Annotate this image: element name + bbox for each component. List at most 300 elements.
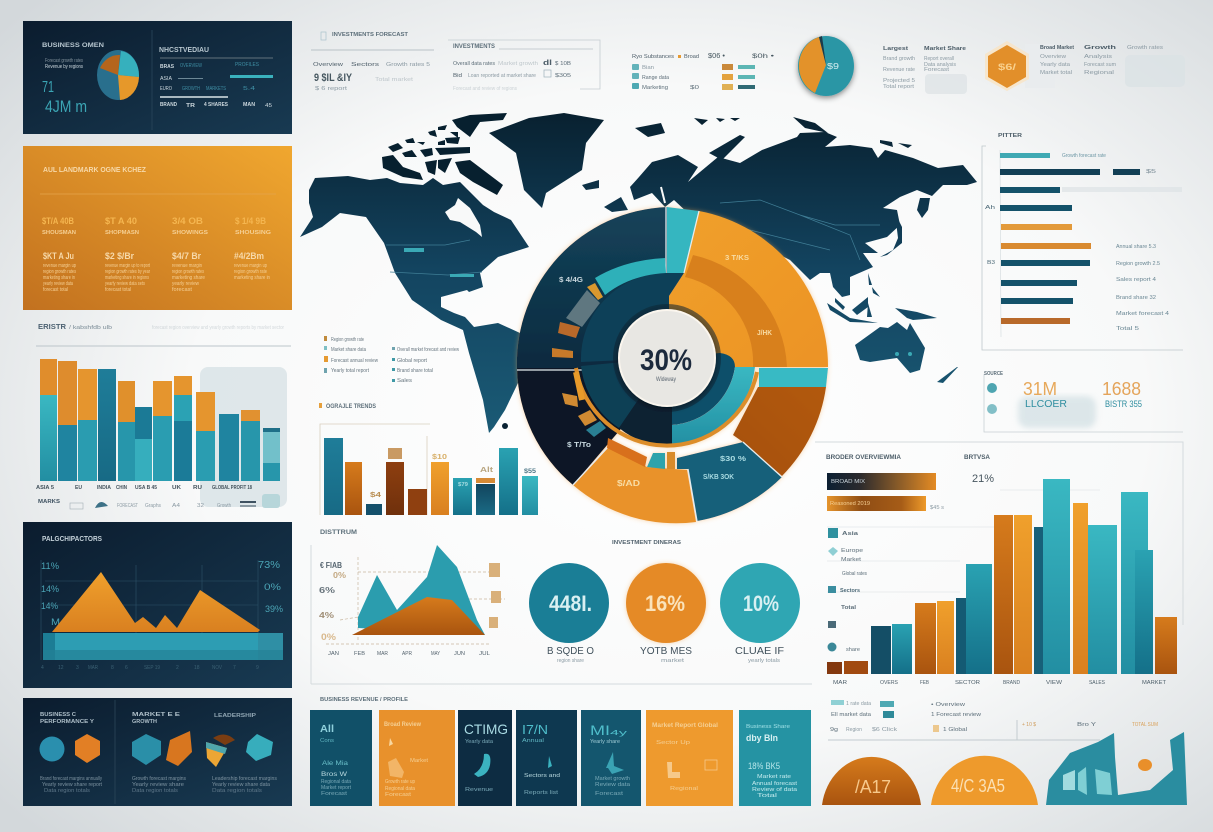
stat columns: SHOUSING bbox=[235, 230, 271, 236]
heading: PITTER bbox=[998, 133, 1022, 139]
x labels bbox=[328, 651, 490, 657]
block: far right text: Yearly data bbox=[1040, 62, 1070, 68]
block: top descriptive text: Projected 5 bbox=[883, 78, 915, 84]
stat columns: SHOUSMAN bbox=[42, 230, 76, 236]
icon row bbox=[38, 494, 280, 509]
descriptions: Yearly review share bbox=[132, 782, 184, 788]
dome stat: rust bbox=[822, 757, 921, 805]
x labels: MAR bbox=[377, 651, 388, 657]
x labels: APR bbox=[402, 651, 412, 657]
bar chart: mid left bbox=[319, 403, 538, 515]
heading: BUSINESS OMEN bbox=[42, 42, 104, 49]
right stats panel: BISTR 355 bbox=[1105, 399, 1142, 409]
body text: region growth rates bbox=[43, 269, 76, 275]
block: top legend table: Ryo Substances bbox=[632, 54, 675, 60]
heading: INVESTMENT DINERAS bbox=[612, 540, 681, 546]
icon: orange gem bbox=[206, 734, 235, 767]
row labels bbox=[985, 153, 1169, 332]
table rows: BRAND bbox=[160, 102, 177, 108]
card: navy two: Reports list bbox=[524, 790, 559, 796]
body text: forecast total bbox=[105, 287, 131, 293]
big orange sector bbox=[669, 211, 828, 367]
body text: yearly review data bbox=[43, 281, 73, 287]
row labels: Region growth 2.5 bbox=[1116, 261, 1160, 267]
stat columns: $4/7 Br bbox=[172, 251, 201, 261]
axis labels: ASIA 5 bbox=[36, 485, 54, 491]
body text: revenue margin bbox=[172, 263, 202, 269]
body text: region growth rates by year bbox=[105, 269, 150, 275]
block: top table: $305 bbox=[555, 73, 571, 79]
heading: DISTTRUM bbox=[320, 530, 357, 536]
block: far right text bbox=[1040, 45, 1185, 87]
card: navy two: Sectors and bbox=[524, 773, 560, 779]
x labels: 6 bbox=[125, 665, 128, 671]
card: navy two bbox=[516, 710, 577, 806]
stat: teal circle: 448I. bbox=[549, 591, 592, 616]
legend: bottom right: Region bbox=[846, 727, 862, 733]
bars bbox=[324, 438, 538, 515]
block: top descriptive text: Largest bbox=[883, 46, 908, 52]
gradient bars: BROAD MIX bbox=[831, 479, 866, 485]
x labels: 12 bbox=[58, 665, 64, 671]
horizontal bar chart bbox=[982, 133, 1183, 350]
x labels: 2 bbox=[176, 665, 179, 671]
block: top table: Forecast and review of regions bbox=[453, 86, 517, 92]
block: top table: INVESTMENTS bbox=[453, 44, 495, 50]
stat: teal circle: region share bbox=[557, 658, 584, 664]
teal area bbox=[358, 545, 485, 635]
card: navy one: Yearly data bbox=[465, 739, 493, 745]
ring segments bbox=[552, 283, 606, 437]
icons bbox=[987, 383, 997, 414]
table rows: TR bbox=[186, 103, 196, 109]
card: teal two: Forecast bbox=[595, 791, 624, 797]
axis labels bbox=[41, 560, 283, 627]
x labels: MAR bbox=[88, 665, 98, 671]
table rows: ASIA bbox=[160, 76, 173, 82]
faint row shading bbox=[1062, 187, 1182, 192]
y labels bbox=[319, 561, 346, 642]
stat columns: $ 1/4 9B bbox=[235, 216, 266, 226]
table rows: 4 SHARES bbox=[204, 102, 229, 108]
inner upper left quadrant bbox=[581, 273, 684, 362]
teal top wedge bbox=[667, 207, 699, 273]
block: top investments text: 9 $IL &IY bbox=[314, 72, 353, 84]
legend: bottom right: Ell market data bbox=[831, 712, 871, 718]
block: top table: $ 10B bbox=[555, 61, 572, 67]
donut labels: $ 4/4G bbox=[559, 277, 584, 284]
axis labels: 14% bbox=[41, 601, 58, 611]
body text: region growth rate bbox=[234, 269, 267, 275]
block: top legend table: Range data bbox=[642, 75, 669, 81]
card: teal three bbox=[739, 710, 811, 806]
block: top legend table bbox=[632, 53, 774, 91]
axis labels: OVERS bbox=[880, 680, 899, 686]
icon: teal hexagon bbox=[132, 734, 161, 765]
body text: marketing share in bbox=[43, 275, 75, 281]
Franz Josef islands bbox=[635, 123, 665, 137]
card: orange one: Growth rate up bbox=[385, 779, 415, 785]
card: teal three: Annual forecast bbox=[752, 781, 798, 787]
y labels: € FIAB bbox=[320, 561, 342, 570]
row labels: Sales report 4 bbox=[1116, 277, 1156, 283]
stat columns: $2 $/Br bbox=[105, 251, 134, 261]
card: teal two: Review data bbox=[595, 782, 630, 788]
card: teal three: Market rate bbox=[757, 774, 791, 780]
icon: orange hexagon badge bbox=[985, 41, 1055, 91]
card: navy two: Annual bbox=[522, 738, 544, 744]
descriptions: Data region totals bbox=[212, 788, 263, 794]
block: far right text: Market total bbox=[1040, 70, 1072, 76]
gradient bars: Reasoned 2019 bbox=[830, 501, 870, 507]
x labels: 4 bbox=[41, 665, 44, 671]
icon row: MARKS bbox=[38, 499, 61, 505]
descriptions: Yearly review share report bbox=[42, 782, 103, 788]
axis labels: MARKET bbox=[1142, 680, 1166, 686]
axis labels: CHIN bbox=[116, 485, 127, 491]
axis labels: INDIA bbox=[97, 485, 111, 491]
card: teal three: Total bbox=[757, 793, 777, 799]
block: far right text: Regional bbox=[1084, 70, 1114, 76]
body text: marketing share in bbox=[234, 275, 270, 281]
navy upper left sector bbox=[517, 207, 667, 368]
dark teal lower sector bbox=[677, 442, 782, 521]
axis labels: 73% bbox=[258, 560, 280, 571]
card: teal three: dby Bln bbox=[746, 733, 778, 743]
table rows: PROFILES bbox=[235, 62, 260, 68]
y labels: 6% bbox=[319, 586, 335, 595]
panel: dark area chart bbox=[23, 522, 292, 688]
block: top investments text: INVESTMENTS FORECAST bbox=[332, 32, 409, 38]
value labels: Alt bbox=[480, 467, 494, 474]
text lines: Revenue by regions bbox=[45, 64, 83, 70]
row labels: Brand share 32 bbox=[1116, 295, 1156, 301]
teal band bbox=[43, 633, 283, 660]
legend: bottom right: 1 Global bbox=[943, 727, 967, 733]
block: top descriptive text: Revenue rate bbox=[883, 67, 915, 73]
block: top descriptive text: Market Share bbox=[924, 46, 966, 52]
block: far right text: Overview bbox=[1040, 54, 1066, 60]
row labels: $5 bbox=[1146, 169, 1156, 175]
body text: forecast total bbox=[43, 287, 68, 293]
icon row: A4 bbox=[172, 503, 180, 509]
circle stats bbox=[529, 540, 800, 664]
panel: top-left dark summary: 4JM m bbox=[45, 97, 87, 116]
chart legend: Market share data bbox=[331, 347, 366, 353]
descriptions: Data region totals bbox=[132, 788, 179, 794]
stat columns bbox=[42, 216, 271, 261]
block: top legend table: $0 bbox=[690, 85, 699, 91]
x labels: 7 bbox=[233, 665, 236, 671]
table rows: OVERVIEW bbox=[180, 63, 202, 69]
axis labels: USA B 45 bbox=[135, 485, 157, 491]
value labels: $4 bbox=[370, 492, 381, 499]
dark orange ring band bbox=[685, 255, 787, 367]
stat: orange circle: 16% bbox=[645, 591, 685, 616]
axis labels: BRAND bbox=[1003, 680, 1020, 686]
card: orange one: Market bbox=[410, 758, 429, 764]
axis labels: M bbox=[51, 617, 60, 627]
row labels: Annual share 5.3 bbox=[1116, 244, 1156, 250]
row labels: Ah bbox=[985, 205, 995, 211]
legend: Asia bbox=[842, 531, 858, 537]
card: teal dark: Market report bbox=[321, 785, 352, 791]
gradient bars: 21% bbox=[972, 473, 994, 485]
donut labels bbox=[559, 255, 772, 488]
block: top investments text: $ 6 report bbox=[315, 86, 348, 92]
legend: share bbox=[846, 647, 860, 653]
stat: orange circle bbox=[626, 563, 706, 664]
block: top table: Overall data rates bbox=[453, 61, 496, 67]
teal right band bbox=[759, 368, 828, 387]
heading: AUL LANDMARK OGNE KCHEZ bbox=[43, 167, 147, 174]
chart legend: Forecast annual review bbox=[331, 358, 378, 364]
dome stat: rust: /A17 bbox=[855, 777, 891, 797]
row labels: B3 bbox=[987, 260, 995, 266]
card: teal dark: Bros W bbox=[321, 772, 347, 778]
card: teal two: 4y bbox=[610, 730, 628, 737]
card: navy one: CTIMG bbox=[464, 721, 508, 737]
block: top descriptive text: Data analysis bbox=[924, 62, 957, 68]
table rows: BRAS bbox=[160, 64, 175, 70]
block: top descriptive text: Report overall bbox=[924, 56, 954, 62]
stat: teal circle bbox=[529, 563, 609, 664]
value labels: $55 bbox=[524, 469, 537, 475]
figures: 31M bbox=[1023, 379, 1057, 399]
x labels: JUL bbox=[479, 651, 490, 657]
card: teal three: 18% BK5 bbox=[748, 761, 780, 771]
bar chart: lower right bbox=[826, 455, 1177, 686]
right heading: NHCSTVEDIAU bbox=[159, 47, 209, 54]
heading: PALGCHIPACTORS bbox=[42, 536, 102, 543]
block: top legend table: Bian bbox=[642, 65, 654, 71]
icon row: 32 bbox=[197, 503, 204, 509]
orange mountains bbox=[52, 572, 260, 632]
figures: 71 bbox=[42, 79, 54, 96]
block: top descriptive text bbox=[883, 46, 967, 94]
descriptions bbox=[40, 776, 278, 794]
axis labels: MAR bbox=[833, 680, 847, 686]
icon row: Growth bbox=[217, 503, 231, 509]
value labels bbox=[370, 448, 537, 499]
bars bbox=[40, 359, 280, 481]
legend: Total bbox=[841, 605, 857, 611]
row labels: Total 5 bbox=[1116, 326, 1139, 332]
block: top investments text: Overview bbox=[313, 62, 344, 68]
icon: orange hexagon bbox=[75, 734, 100, 763]
headings bbox=[40, 712, 256, 725]
stacked bar chart heading: forecast region overview and yearly growth reports by market sector bbox=[152, 325, 284, 331]
icon row: FORECAST bbox=[117, 503, 138, 509]
card: orange one: Forecast bbox=[385, 792, 412, 798]
chart legend: Brand share total bbox=[397, 368, 433, 374]
legend: Global rates bbox=[842, 571, 867, 577]
block: top investments text bbox=[311, 32, 434, 92]
descriptions: Brand forecast margins annually bbox=[40, 776, 102, 782]
axis labels bbox=[36, 485, 252, 491]
card: orange two: Market Report Global bbox=[652, 723, 718, 729]
table rows: 5.4 bbox=[243, 86, 255, 92]
table rows bbox=[160, 58, 273, 109]
card: teal two bbox=[581, 710, 641, 806]
block: far right text: Broad Market bbox=[1040, 45, 1074, 51]
grid lines bbox=[41, 560, 258, 660]
legend: bottom right: + 10 $ bbox=[1022, 722, 1036, 728]
card: navy two: I7/N bbox=[522, 722, 548, 737]
x labels: 18 bbox=[194, 665, 200, 671]
stat: teal circle: B SQDE O bbox=[547, 646, 594, 657]
block: top table: Market growth bbox=[498, 61, 538, 67]
card: teal two: Yearly share bbox=[590, 739, 620, 745]
headings: BUSINESS C bbox=[40, 712, 76, 718]
axis labels bbox=[833, 680, 1166, 686]
stat columns: $KT A Ju bbox=[43, 251, 74, 261]
block: far right text: Growth rates bbox=[1127, 45, 1164, 51]
value labels: $79 bbox=[458, 482, 468, 488]
legend bbox=[828, 528, 867, 653]
card: teal two: Market growth bbox=[595, 776, 630, 782]
axis labels: RU bbox=[193, 485, 202, 491]
table rows: MAN bbox=[243, 102, 255, 108]
stat columns: SHOPMASN bbox=[105, 230, 139, 236]
body text bbox=[43, 263, 270, 293]
y labels: 0% bbox=[321, 632, 336, 642]
Arctic islands bbox=[382, 113, 507, 195]
card: teal three: Business Share bbox=[746, 724, 790, 730]
lower ring segments bbox=[607, 438, 675, 469]
body text: region growth rates bbox=[172, 269, 204, 275]
headings: LEADERSHIP bbox=[214, 713, 256, 719]
Siberian islands bbox=[793, 117, 912, 148]
stat: light teal circle: 10% bbox=[743, 591, 779, 616]
axis labels: UK bbox=[172, 485, 181, 491]
card: orange one bbox=[379, 710, 455, 806]
block: top legend table: $0h • bbox=[752, 54, 774, 60]
headings: PERFORMANCE Y bbox=[40, 719, 94, 725]
x labels: SEP 19 bbox=[144, 665, 160, 671]
axis labels: FEB bbox=[920, 680, 930, 686]
legend: bottom right: • Overview bbox=[931, 702, 966, 708]
right stats panel bbox=[984, 371, 1183, 432]
axis labels: 0% bbox=[264, 582, 281, 592]
legend: bottom right: Bro Y bbox=[1077, 722, 1097, 728]
axis labels: 39% bbox=[265, 604, 283, 614]
legend: bottom right bbox=[828, 700, 1158, 740]
rust area bbox=[352, 597, 485, 635]
inner bottom quadrant bbox=[619, 358, 672, 447]
right markers bbox=[489, 563, 501, 628]
block: top descriptive text: Forecast bbox=[924, 67, 950, 73]
Iceland bbox=[582, 180, 599, 190]
chart legend: Sales bbox=[397, 378, 413, 384]
descriptions: Leadership forecast margins bbox=[212, 776, 278, 782]
Greenland bbox=[489, 113, 604, 208]
card: teal three: Review of data bbox=[752, 787, 797, 793]
legend: Sectors bbox=[840, 588, 860, 594]
chart legend bbox=[324, 336, 459, 384]
x labels bbox=[41, 665, 259, 671]
stat: light teal circle: CLUAE IF bbox=[735, 646, 784, 657]
icon row: Graphs bbox=[145, 503, 161, 509]
value labels: $10 bbox=[432, 454, 447, 461]
card: orange two: Sector Up bbox=[656, 740, 690, 746]
chart legend: Overall market forecast and review bbox=[397, 347, 459, 353]
black lower left sector bbox=[517, 368, 667, 485]
row labels: Market forecast 4 bbox=[1116, 311, 1169, 317]
card: orange one: Broad Review bbox=[384, 722, 421, 728]
stat columns: 3/4 OB bbox=[172, 216, 204, 226]
top pie chart: $9 bbox=[827, 62, 840, 71]
orange ring bbox=[576, 368, 757, 446]
table rows: GROWTH bbox=[182, 86, 200, 92]
stacked bar chart heading bbox=[36, 324, 291, 346]
dome stat: orange: 4/C 3A5 bbox=[951, 776, 1005, 796]
descriptions: Data region totals bbox=[44, 788, 91, 794]
guide lines bbox=[326, 557, 505, 644]
area chart panel bbox=[311, 442, 1183, 684]
body text: revenue margin up bbox=[234, 263, 267, 269]
body text: marketing share bbox=[172, 275, 205, 281]
card: orange two bbox=[646, 710, 733, 806]
body text: revenue margin up to report bbox=[105, 263, 150, 269]
block: far right text: Forecast sum bbox=[1084, 62, 1116, 68]
Australia bbox=[855, 322, 925, 373]
map borders and lakes bbox=[386, 187, 912, 429]
chart legend: Global report bbox=[397, 358, 428, 364]
block: top investments text: Growth rates 5 bbox=[386, 62, 430, 68]
donut labels: S/KB 3OK bbox=[703, 474, 734, 481]
legend: Europe bbox=[841, 548, 863, 554]
chart legend: Region growth rate bbox=[331, 337, 364, 343]
bars bbox=[1000, 153, 1140, 324]
dome stat: orange bbox=[931, 756, 1038, 805]
headings: GROWTH bbox=[132, 719, 157, 725]
axis labels: SALES bbox=[1089, 680, 1106, 686]
inner teal band bbox=[672, 367, 755, 447]
legend: bottom right: 1 rate data bbox=[846, 701, 871, 707]
axis labels: EU bbox=[75, 485, 82, 491]
text lines: Forecast growth rates bbox=[45, 58, 83, 64]
y labels: 4% bbox=[319, 611, 334, 620]
card: teal dark: Regional data bbox=[321, 779, 351, 785]
heading: SOURCE bbox=[984, 371, 1004, 377]
table rows: EURO bbox=[160, 86, 172, 92]
donut labels: $/AD bbox=[617, 479, 640, 488]
card: navy one: Revenue bbox=[465, 787, 493, 793]
teal terrain map bbox=[1046, 732, 1187, 805]
donut labels: $30 % bbox=[720, 456, 747, 463]
descriptions: Yearly review share data bbox=[212, 782, 270, 788]
card: orange one: Regional data bbox=[385, 786, 415, 792]
text lines bbox=[45, 58, 83, 70]
bar chart: lower right: BRTVSA bbox=[964, 455, 991, 461]
Sakhalin bbox=[917, 198, 930, 218]
heading bbox=[319, 403, 376, 410]
card: orange two: Regional bbox=[670, 786, 698, 792]
x labels: 8 bbox=[111, 665, 114, 671]
card: teal dark: All bbox=[320, 724, 334, 735]
North and South America bbox=[300, 176, 535, 433]
stat columns: SHOWINGS bbox=[172, 230, 209, 236]
Southeast Asia islands bbox=[827, 273, 937, 323]
body text: revenue margin up bbox=[43, 263, 76, 269]
panel: top-left dark summary bbox=[23, 21, 292, 134]
bottom card row heading: BUSINESS REVENUE / PROFILE bbox=[320, 697, 409, 703]
donut labels: $ T/To bbox=[567, 442, 591, 449]
inner dark teal sector bbox=[667, 353, 735, 425]
legend: bottom right: $6 Click bbox=[872, 727, 898, 733]
center value: 30% bbox=[640, 344, 692, 377]
